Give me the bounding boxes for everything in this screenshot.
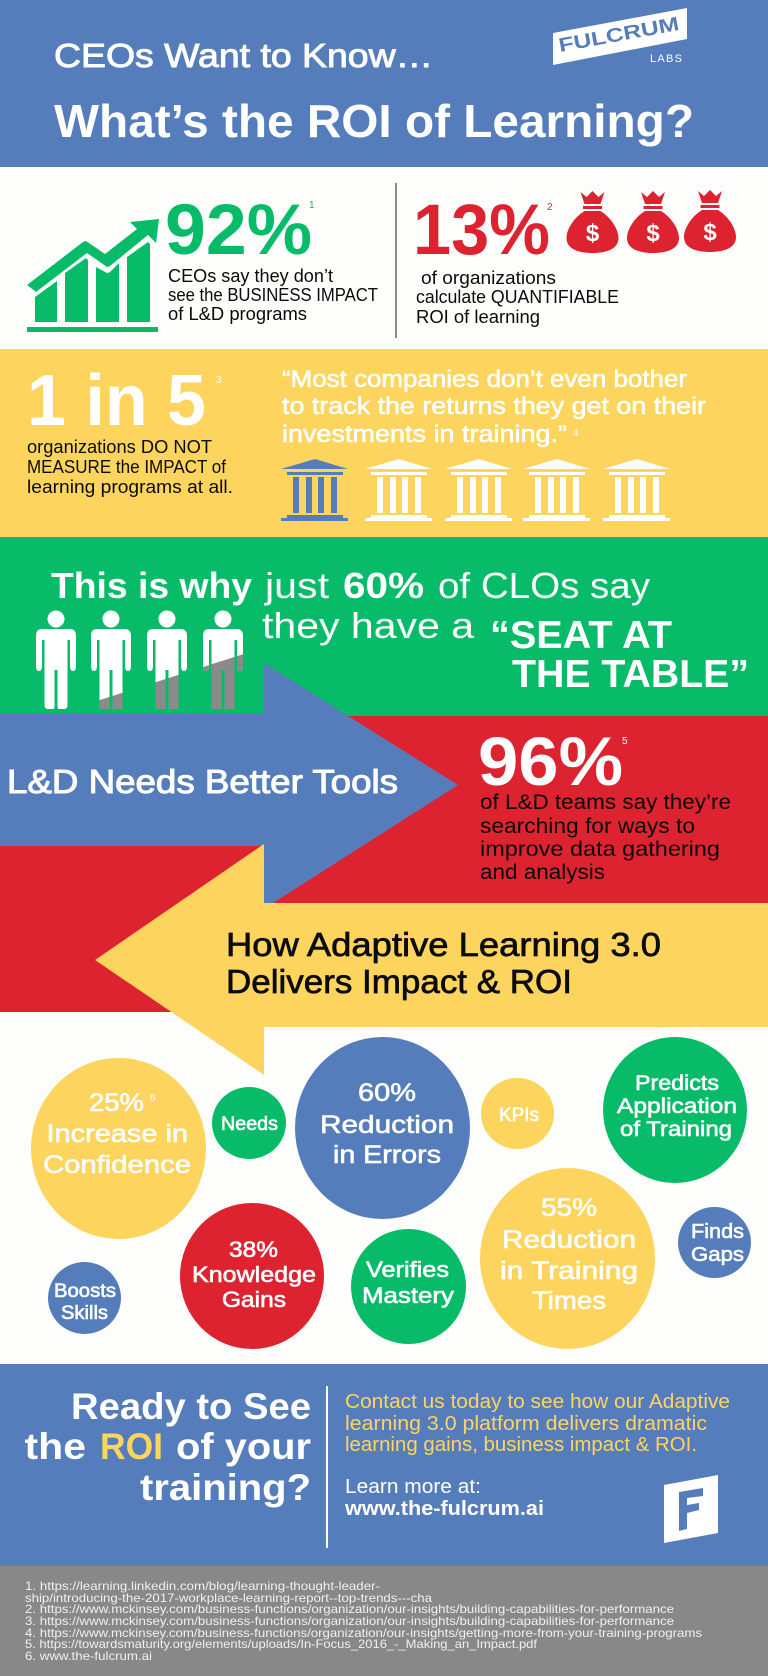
bubble: 25% increase in confidence (31, 1058, 206, 1239)
panel: footnotes: 3. https://www.mckinsey.com/business-functions/organization/our-insights/building-capabilities-for-performance (25, 1614, 674, 1628)
bubble: 25% increase in confidence: 25% (89, 1089, 144, 1117)
panel: 96 percent stat (478, 723, 731, 884)
footnote marker 4: 4 (573, 428, 579, 439)
text: of L&D teams (480, 791, 731, 884)
icon: four people, 60 percent filled (36, 610, 243, 709)
bubble: 25% increase in confidence: Confidence (43, 1151, 191, 1179)
heading: CEOs Want to Know: CEOs Want to Know… (54, 37, 433, 74)
quote: “Most companies don’t even bother (282, 366, 687, 393)
heading: ready to see the ROI: the (24, 1426, 86, 1467)
panel: header (0, 0, 768, 167)
text: contact us: learning gains, business impact & ROI. (345, 1434, 697, 1456)
bubble: 60% reduction in errors: 60% (358, 1079, 416, 1107)
text: organizations do not measure: learning programs at all. (27, 477, 233, 497)
icon: five temples (281, 459, 670, 521)
bubble: predicts application of training: of Training (620, 1118, 732, 1141)
icon: money bags: $ (646, 220, 660, 247)
bubble: 60% reduction in errors: Reduction (320, 1111, 454, 1139)
panel: footnotes: 6. www.the-fulcrum.ai (25, 1649, 152, 1663)
panel: footnotes: 2. https://www.mckinsey.com/business-functions/organization/our-insights/building-capabilities-for-performance (25, 1602, 674, 1616)
heading: ready to see the ROI: ROI (100, 1426, 163, 1467)
panel: footnotes (0, 1566, 768, 1676)
text: of L&D teams: improve data gathering (480, 838, 720, 861)
bubble: 38% knowledge gains: Knowledge (192, 1262, 316, 1287)
panel: 92 percent stat (27, 191, 378, 332)
bubble: boosts skills (48, 1262, 121, 1334)
bubble: finds gaps: Finds (691, 1221, 744, 1243)
text: CEOs say: of L&D programs (168, 304, 307, 324)
text: of L&D teams: searching for ways to (480, 815, 695, 838)
text: contact us: learning 3.0 platform delivers dramatic (345, 1413, 707, 1435)
stat: 92%: 92% (165, 191, 312, 270)
heading: how adaptive learning delivers: Delivers Impact & ROI (226, 963, 572, 1000)
quote: to track the returns they get on their (282, 393, 706, 420)
heading: this is why just 60% of CLOs say (51, 565, 650, 646)
arrow: blue right arrow (0, 663, 458, 903)
heading: this is why just 60% of CLOs say: they have a (262, 605, 475, 646)
quote: investments in training.” (282, 421, 567, 448)
arrow: yellow left arrow (95, 844, 768, 1075)
quote (282, 366, 706, 448)
heading: this is why just 60% of CLOs say: just (264, 565, 329, 606)
text: contact us (345, 1391, 730, 1456)
bubble: 55% reduction in training times: in Training (500, 1257, 638, 1285)
bubble: verifies mastery (351, 1229, 466, 1344)
logo: Fulcrum Labs (553, 8, 687, 65)
bubble: predicts application of training: Application (617, 1095, 737, 1118)
bubble: verifies mastery: Verifies (366, 1257, 449, 1282)
text: of L&D teams: and analysis (480, 861, 605, 884)
heading: ready to see the ROI: Ready to See (71, 1386, 311, 1427)
bubble: needs (212, 1087, 286, 1159)
icon: money bags: $ (703, 219, 717, 246)
footnote marker 1: 1 (309, 200, 315, 211)
logo: Fulcrum Labs: LABS (650, 53, 682, 65)
text: organizations do not measure: organizations DO NOT (27, 437, 212, 457)
bubble: predicts application of training: Predicts (635, 1072, 719, 1095)
bubble: 55% reduction in training times (480, 1168, 655, 1349)
heading: this is why just 60% of CLOs say: of CLOs say (438, 565, 650, 606)
bubble: 60% reduction in errors (295, 1037, 470, 1219)
heading: how adaptive learning delivers (226, 926, 661, 1000)
stat: 96%: 96% (478, 723, 623, 800)
heading: how adaptive learning delivers: How Adaptive Learning 3.0 (226, 926, 661, 963)
text: organizations do not measure (27, 437, 233, 497)
stat: 13%: 13% (413, 191, 550, 270)
panel: footnotes: 4. https://www.mckinsey.com/business-functions/organization/our-insights/getting-more-from-your-training-programs (25, 1626, 702, 1640)
heading: ready to see the ROI: of your (176, 1426, 311, 1467)
panel: seat at the table (0, 537, 768, 717)
heading: ready to see the ROI: training? (140, 1467, 311, 1508)
text: CEOs say (168, 266, 378, 324)
footnote marker 2: 2 (547, 202, 553, 213)
bubble: 38% knowledge gains: Gains (222, 1287, 286, 1312)
text: learn more: Learn more at: (345, 1476, 481, 1498)
bubble: predicts application of training (603, 1037, 747, 1183)
text: organizations do not measure: MEASURE the IMPACT of (27, 457, 227, 477)
stat: 1 in 5: 1 in 5 (27, 361, 206, 441)
text: CEOs say: CEOs say they don’t (168, 266, 333, 286)
footnote marker 6: 6 (150, 1093, 156, 1104)
callout: seat at the table: THE TABLE” (512, 653, 749, 696)
text: of organizations: of organizations (421, 268, 556, 288)
text: CEOs say: see the BUSINESS IMPACT (168, 285, 378, 305)
icon: F logo (664, 1475, 718, 1543)
heading: ready to see the ROI (24, 1386, 311, 1508)
panel: footnotes: ship/introducing-the-2017-workplace-learning-report--top-trends---cha (25, 1591, 432, 1605)
text: of organizations: calculate QUANTIFIABLE (416, 287, 619, 307)
heading: this is why just 60% of CLOs say: 60% (343, 565, 424, 606)
panel: footnotes: 1. https://learning.linkedin.com/blog/learning-thought-leader- (25, 1579, 380, 1593)
title: What's the ROI of Learning: What’s the ROI of Learning? (54, 95, 694, 147)
bubble: 55% reduction in training times: Times (532, 1287, 606, 1315)
panel: footnotes: 5. https://towardsmaturity.org/elements/uploads/In-Focus_2016_-_Making_an_Impact.pdf (25, 1637, 538, 1651)
footnote marker 3: 3 (216, 375, 222, 386)
text: learn more (344, 1476, 544, 1520)
bubble: 25% increase in confidence: Increase in (46, 1120, 188, 1148)
panel: 1 in 5 (0, 349, 768, 537)
bubble: 38% knowledge gains: 38% (229, 1237, 278, 1262)
bubble: 38% knowledge gains (180, 1203, 324, 1349)
bubble: 60% reduction in errors: in Errors (333, 1141, 441, 1169)
heading: this is why just 60% of CLOs say: This is why (51, 565, 252, 606)
text: learn more: www.the-fulcrum.ai (344, 1498, 544, 1520)
text: contact us: Contact us today to see how our Adaptive (345, 1391, 730, 1413)
bubble: needs: Needs (221, 1114, 278, 1135)
bubble: finds gaps: Gaps (691, 1244, 744, 1266)
callout: seat at the table (490, 614, 749, 696)
text: of organizations: ROI of learning (416, 307, 540, 327)
bubble: finds gaps (678, 1207, 751, 1278)
bubble: 55% reduction in training times: 55% (541, 1194, 597, 1222)
icon: money bags: $ (586, 220, 600, 247)
callout: seat at the table: “SEAT AT (490, 614, 672, 657)
bubble: verifies mastery: Mastery (362, 1283, 454, 1308)
bubble: 55% reduction in training times: Reduction (502, 1226, 636, 1254)
icon: growth chart (27, 219, 159, 332)
footnote marker 5: 5 (622, 736, 628, 747)
heading: L&D needs better tools: L&D Needs Better Tools (7, 763, 398, 800)
bubble: KPIs: KPIs (499, 1105, 539, 1126)
text: of L&D teams: of L&D teams say they’re (480, 791, 731, 814)
panel: 13 percent stat (413, 190, 736, 327)
panel: call to action (0, 1364, 768, 1566)
bubble: boosts skills: Boosts (54, 1281, 116, 1302)
panel: red background (0, 716, 768, 1012)
logo: Fulcrum Labs: FULCRUM (557, 13, 681, 57)
icon: money bags (566, 190, 736, 253)
bubble: boosts skills: Skills (61, 1303, 108, 1324)
text: of organizations (416, 268, 619, 327)
bubble: KPIs (481, 1078, 554, 1149)
